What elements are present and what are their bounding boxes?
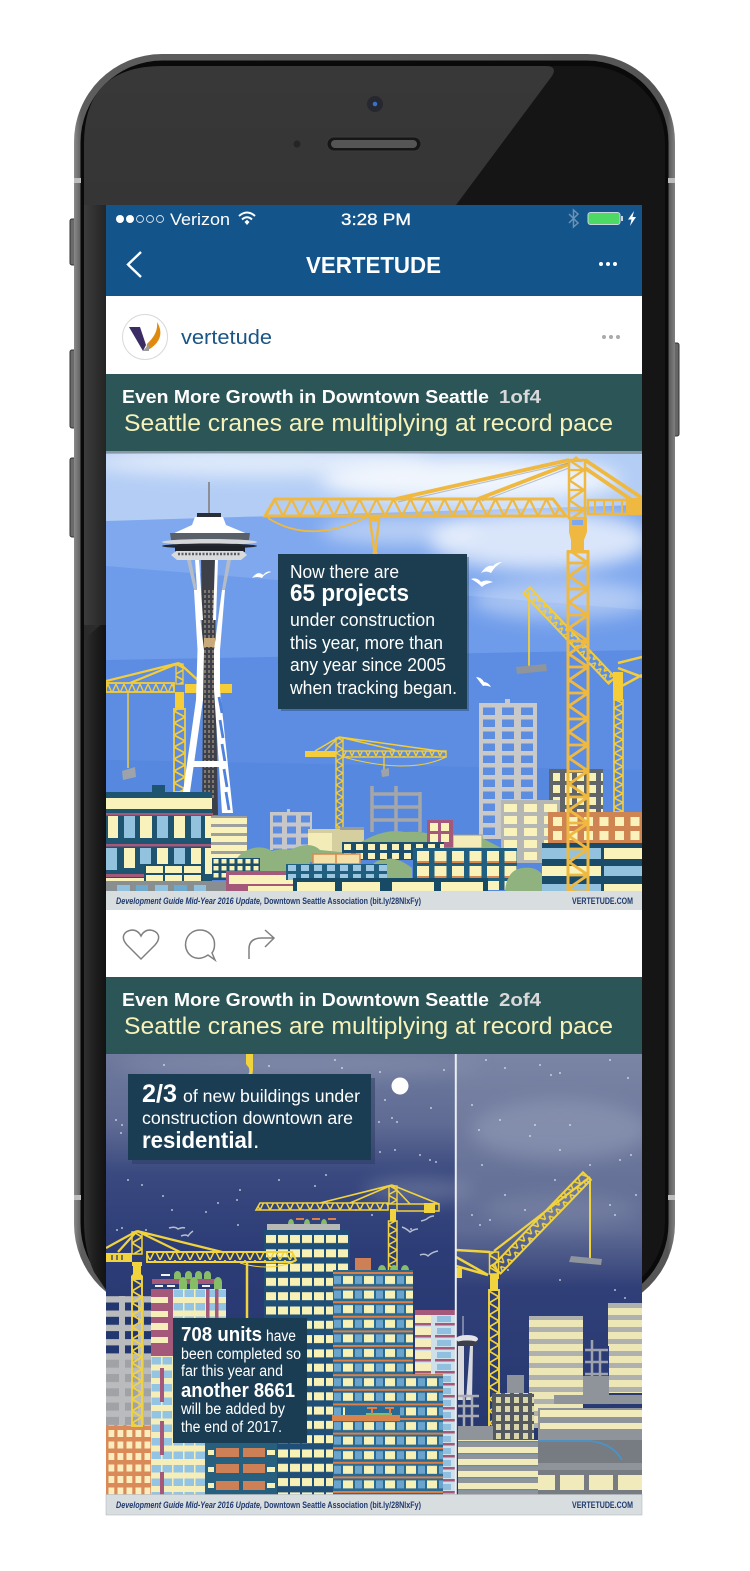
callout: 708 units: will be added by xyxy=(180,1401,285,1418)
callout: 708 units: another 8661 xyxy=(181,1380,295,1402)
night sky xyxy=(106,1053,650,1495)
callout: 65 projects: any year since 2005 xyxy=(290,655,446,675)
crane: background right xyxy=(516,587,642,812)
icon: front camera xyxy=(367,96,383,112)
crane: left xyxy=(106,663,232,792)
callout: two thirds residential: 2/3 xyxy=(142,1080,177,1108)
moon xyxy=(392,1078,408,1094)
heading: panel 2: 2of4 xyxy=(499,990,541,1010)
footer: panel 2 source: Downtown Seattle Association (bit.ly/28NlxFy) xyxy=(264,1500,421,1511)
icon: earpiece speaker xyxy=(327,137,421,151)
callout: 65 projects xyxy=(278,554,469,711)
birds xyxy=(252,562,502,687)
callout: 65 projects: this year, more than xyxy=(290,633,443,653)
icon: comment bubble xyxy=(186,930,215,960)
heading: panel 1: Even More Growth in Downtown Seattle xyxy=(122,387,489,407)
icon: proximity sensor xyxy=(294,140,300,148)
heading: panel 2: Seattle cranes are multiplying at record pace xyxy=(124,1013,613,1040)
crane cable behind buildings xyxy=(246,1262,248,1320)
heading: panel 1: Seattle cranes are multiplying at record pace xyxy=(124,410,613,437)
right side distant buildings xyxy=(458,1303,642,1428)
heading: panel 2 xyxy=(106,977,642,1054)
footer: panel 1 source: Downtown Seattle Association (bit.ly/28NlxFy) xyxy=(264,896,421,907)
callout: 65 projects: 65 projects xyxy=(290,580,409,607)
profile row: vertetude xyxy=(181,327,272,349)
sky xyxy=(90,448,650,891)
callout: 65 projects: Now there are xyxy=(290,562,399,582)
callout: two thirds residential: construction downtown are xyxy=(142,1108,353,1128)
icon: crane hook xyxy=(246,1054,253,1074)
lower navy building with orange panels xyxy=(205,1443,277,1495)
callout: 65 projects: when tracking began. xyxy=(289,678,457,698)
footer: panel 2 source: Development Guide Mid-Year 2016 Update, xyxy=(116,1500,262,1511)
divider strip under heading 1 xyxy=(106,451,642,454)
profile row xyxy=(106,296,642,374)
blue front apartment building xyxy=(332,1258,443,1495)
crane mast in front of buildings xyxy=(568,552,588,892)
gray frame buildings xyxy=(270,699,603,850)
heading: panel 1 xyxy=(106,374,642,451)
status and navigation bar: VERTETUDE xyxy=(306,252,441,278)
footer: panel 1 source: Development Guide Mid-Year 2016 Update, xyxy=(116,896,262,907)
gray and orange left buildings xyxy=(106,1296,152,1495)
callout: 708 units: far this year and xyxy=(181,1363,283,1380)
callout: 65 projects: under construction xyxy=(290,610,435,630)
heading: panel 2: Even More Growth in Downtown Seattle xyxy=(122,990,489,1010)
phone body xyxy=(70,54,679,1312)
crane: right luffing xyxy=(456,1172,602,1428)
pink apartment building xyxy=(151,1271,226,1495)
footer: panel 2 source: VERTETUDE.COM xyxy=(572,1500,633,1511)
icon: share arrow xyxy=(249,930,274,959)
callout: two thirds residential: of new buildings under xyxy=(183,1086,360,1106)
callout: 708 units: the end of 2017. xyxy=(181,1419,282,1436)
crane: large foreground xyxy=(265,456,642,556)
crane: centre xyxy=(305,737,446,828)
footer: panel 2 source xyxy=(106,1494,642,1515)
callout: two thirds residential: . xyxy=(253,1127,259,1153)
callout: 708 units: have xyxy=(266,1328,296,1345)
footer: panel 1 source xyxy=(106,891,642,910)
callout: two thirds residential: residential xyxy=(142,1127,253,1153)
right pink building xyxy=(415,1310,455,1495)
status and navigation bar: Verizon xyxy=(170,210,230,229)
icon: heart xyxy=(123,930,159,959)
panel 2: night skyline illustration xyxy=(106,1053,650,1495)
right side foreground buildings xyxy=(458,1393,642,1495)
left teal building xyxy=(106,785,226,891)
right side small needle xyxy=(456,1316,478,1400)
status and navigation bar: 3:28 PM xyxy=(341,211,411,229)
callout: two thirds residential xyxy=(128,1074,375,1164)
callout: 708 units xyxy=(173,1318,307,1443)
callout: 708 units: been completed so xyxy=(181,1346,301,1363)
panel 1: daytime skyline illustration xyxy=(90,448,650,892)
crane: left foreground xyxy=(106,1231,296,1426)
birds xyxy=(169,1216,438,1256)
space needle xyxy=(162,482,257,815)
vertical divider xyxy=(455,1054,457,1495)
crane: top centre xyxy=(256,1185,439,1271)
footer: panel 1 source: VERTETUDE.COM xyxy=(572,896,633,907)
status and navigation bar xyxy=(106,205,642,296)
heading: panel 1: 1of4 xyxy=(499,387,541,407)
callout: 708 units: 708 units xyxy=(181,1324,262,1346)
low mid-ground buildings and trees xyxy=(211,800,642,891)
tall navy apartment tower xyxy=(264,1219,350,1495)
action row xyxy=(106,910,642,977)
